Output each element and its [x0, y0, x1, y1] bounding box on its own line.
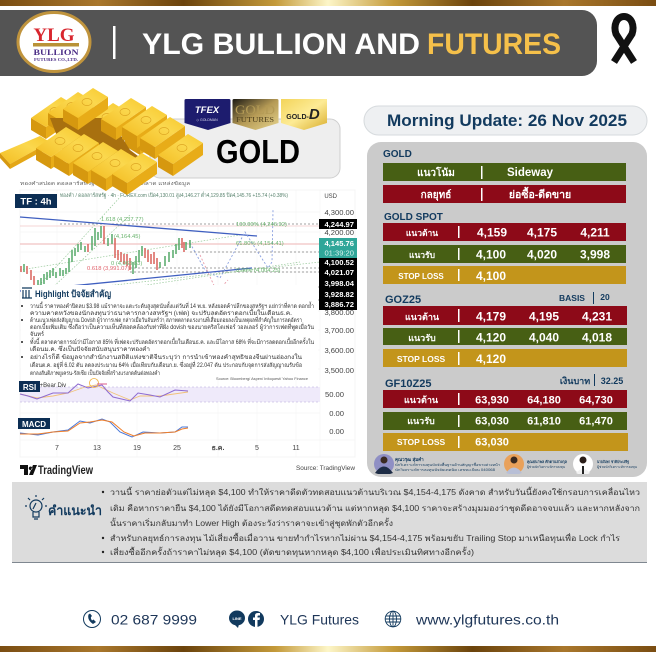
- footer contacts: YLG Futures: [280, 612, 359, 628]
- analyst 1: [374, 454, 500, 474]
- highlight bullets: ทั้งนี้ ตลาดคาดการณ์ว่ามีโอกาส 85% ที่เฟดจะปรับลดอัตราดอกเบี้ยในเดือนธ.ค. และมีโอกาส 68% ที่จะมีการลดดอกเบี้ยอีกครั้งใน: [30, 336, 314, 346]
- section: GF10Z25: 32.25: [601, 376, 623, 386]
- section: GF10Z25: 61,810: [527, 416, 561, 428]
- price axis: [319, 194, 357, 436]
- time axis: [55, 445, 300, 452]
- price axis: 4,145.76: [324, 239, 354, 248]
- icon: LINE: LINE: [232, 616, 242, 621]
- RSI label: [19, 381, 40, 392]
- icon: Gold-D badge: GOLD-D: [286, 106, 320, 123]
- panel: price levels: [367, 142, 647, 477]
- price axis: 3,886.72: [324, 300, 354, 309]
- price axis: 50.00: [325, 390, 344, 399]
- date pill heading: [364, 106, 647, 135]
- icon: light bulb: [25, 495, 47, 519]
- analyst 1: นักวิเคราะห์การลงทุนปัจจัยเทคนิค เลขทะเบียน 040068: [395, 468, 495, 473]
- section: GOLD trend: ย่อซื้อ-ดีดขาย: [509, 186, 571, 201]
- section: GOZ25: [383, 292, 627, 367]
- price axis: 01:39:20: [324, 248, 354, 258]
- header banner: [0, 10, 597, 76]
- icon: TFEX badge: ◇ GOLDMAN: [196, 118, 218, 122]
- chart annotations: 1.618 (4,237.77): [101, 217, 144, 223]
- analyst 2: [504, 454, 568, 474]
- TF label: TF : 4h: [20, 196, 52, 208]
- chart frame: [20, 190, 355, 457]
- time axis: 7: [55, 445, 59, 452]
- section: GOLD trend: [383, 149, 626, 203]
- section: GOZ25: 4,179: [476, 310, 506, 324]
- RSI chart: t+Bear Div: [38, 383, 66, 389]
- recommendation bullets: วานนี้ ราคาย่อตัวแต่ไม่หลุด $4,100 ทำให้ราคาดีดตัวทดสอบแนวต้านบริเวณ $4,154-4,175 ดังคาด สำหรับวันนี้ยังคงใช้กรอบการเคลื่อนไหว: [110, 486, 640, 497]
- highlight bullets: เดือนม.ค. ซึ่งเป็นปัจจัยสนับสนุนราคาทองคำ: [30, 344, 150, 353]
- section: GOLD trend: GOLD: [383, 149, 412, 160]
- chart grid: [20, 190, 355, 457]
- Highlight heading: [21, 285, 318, 380]
- footer contacts: www.ylgfutures.co.th: [415, 612, 559, 628]
- chart annotations: [101, 217, 287, 274]
- price axis: 4,244.97: [324, 220, 354, 229]
- analyst 3: ผู้ช่วยนักวิเคราะห์การลงทุน: [597, 465, 638, 470]
- time axis: 11: [292, 445, 300, 452]
- section: GOZ25: แนวรับ: [408, 333, 436, 343]
- Highlight heading: Highlight ปัจจัยสำคัญ: [35, 288, 111, 300]
- panel: chart: (95.58): [108, 285, 126, 291]
- recommendation heading: คำแนะนำ: [48, 503, 102, 518]
- highlight bullets: จันทร์: [30, 330, 45, 338]
- price axis: 3,700.00: [324, 326, 354, 335]
- section: GOLD SPOT: 4,100: [476, 248, 506, 262]
- time axis: 25: [173, 445, 181, 452]
- MACD label: MACD: [22, 420, 46, 429]
- analyst 1: คุณวรุฒ สุ่มคำ: [395, 456, 424, 463]
- section: GOLD SPOT: STOP LOSS: [398, 272, 444, 281]
- price axis: 0.00: [329, 409, 344, 418]
- chart level lines: [60, 224, 320, 300]
- projected path red: [200, 255, 228, 292]
- price axis: 3,800.00: [324, 308, 354, 317]
- panel: chart: ทองคำ / ดอลลาร์สหรัฐ · 4h · FOREX.com เปิด4,130.01 สูง4,146.27 ต่ำ4,129.85 ปิด4,145.76 +15.74 (+0.38%): [60, 191, 288, 199]
- section: GOZ25: 4,231: [582, 310, 612, 324]
- icon: Gold Futures badge: [232, 99, 278, 130]
- section: GF10Z25: GF10Z25: [385, 378, 431, 390]
- chart annotations: 0 (4,063.83): [111, 261, 142, 267]
- RSI chart: [19, 378, 320, 402]
- recommendation bullets: สำหรับกลยุทธ์การลงทุน ไม้เสี่ยงซื้อเมื่อวาน ขายทำกำไรหากไม่ผ่าน $4,154-4,175 พร้อมขยับ Trailing Stop มาเหนือทุนเพื่อ Lock กำไร: [110, 532, 620, 543]
- section: GOZ25: 4,195: [529, 310, 559, 324]
- section: GF10Z25: 61,470: [579, 416, 613, 428]
- section: GF10Z25: 63,030: [475, 416, 509, 428]
- panel: GOLD label box: [150, 119, 340, 178]
- section: GF10Z25: แนวต้าน: [404, 395, 439, 405]
- section: GOLD SPOT: 4,100: [476, 269, 506, 283]
- logo: YLG Bullion: YLG: [33, 25, 75, 46]
- recommendation bullets: เดิม คือหากราคายืน $4,100 ได้ยังมีโอกาสดีดทดสอบแนวต้าน แต่หากหลุด $4,100 ราคาจะสร้างมุมมองว่าชุดดีดอาจจบแล้ว และหากหลังจาก: [110, 504, 640, 513]
- section: GF10Z25: เงินบาท: [560, 376, 590, 386]
- candlesticks: [21, 226, 190, 290]
- section: GOZ25: 4,018: [582, 330, 612, 344]
- highlight bullets: [21, 300, 314, 381]
- GOLD heading: GOLD: [216, 133, 300, 170]
- title: [142, 28, 561, 61]
- time axis: 13: [93, 445, 101, 452]
- price axis: 3,500.00: [324, 366, 354, 375]
- highlight bullets: วานนี้ ราคาทองคำปิดลบ $3.98 แม้ราคาจะแตะระดับสูงสุดนับตั้งแต่วันที่ 14 พ.ย. หลังยอดค้าปลีกของสหรัฐฯ แย่กว่าที่คาด ตอกย้ำ: [30, 300, 314, 310]
- icon: gold bars: [0, 88, 203, 195]
- chart annotations: 0.00% (4,004.25): [236, 268, 281, 274]
- chart info line: ทองคำสปอต ดอลลาร์สหรัฐ ต่อ ออนซ์ ข้อมูลตลาด แหล่งข้อมูล: [20, 180, 190, 187]
- section: GF10Z25: 63,930: [475, 394, 509, 406]
- icon: Gold-D badge: [281, 99, 327, 130]
- analyst 3: นายภิเษก ชาติประเสริฐ: [597, 458, 629, 465]
- icon: LINE: [229, 610, 245, 628]
- projected path blue: [190, 210, 273, 278]
- panel: recommendation: [12, 482, 647, 563]
- date pill heading: Morning Update: 26 Nov 2025: [387, 111, 627, 130]
- price axis: 3,998.04: [324, 279, 355, 288]
- section: GOLD trend: Sideway: [507, 167, 554, 179]
- section: GF10Z25: แนวรับ: [407, 416, 435, 426]
- blue trend channel: [20, 217, 257, 291]
- section: GOLD SPOT: GOLD SPOT: [384, 212, 443, 223]
- highlight bullets: ด้านแนวเฟดส่งสัญญาณ Dovish ผู้ว่าการเฟด กล่าวเมื่อวันจันทร์ว่า สภาพตลาดแรงงานที่เสื่อมถอยลงเป็นเหตุผลที่สำคัญในการลดอัตรา: [30, 315, 302, 324]
- time axis: 19: [133, 445, 141, 452]
- icon: Gold Futures badge: GOLD: [235, 103, 275, 117]
- section: GOLD SPOT: 4,020: [527, 248, 557, 262]
- section: GOZ25: 4,120: [476, 352, 506, 366]
- TradingView logo: [20, 463, 94, 477]
- icon: TFEX badge: TFEX: [195, 105, 220, 116]
- logo: YLG Bullion: BULLION: [34, 47, 79, 57]
- price axis: 4,300.00: [324, 208, 354, 217]
- chart annotations: 100.00% (4,246.92): [236, 222, 287, 228]
- chart annotations: (4,164.45): [114, 234, 140, 240]
- TF label: [15, 194, 57, 208]
- section: GOLD trend: แนวโน้ม: [417, 166, 455, 179]
- section: GF10Z25: [383, 374, 628, 451]
- analyst 3: [573, 454, 638, 474]
- highlight bullets: ดอกเบี้ยเพิ่มเติม ซึ่งถือว่าเป็นความเห็นที่สอดคล้องกับท่าทีฝั่ง dovish ของนายคริสโตเฟอร์ วอลเลอร์ ผู้ว่าการเฟดที่พูดเมื่อวัน: [30, 321, 314, 331]
- price axis: 4,200.00: [324, 228, 354, 237]
- section: GF10Z25: 64,730: [579, 394, 613, 406]
- price axis: 4,021.07: [324, 268, 354, 277]
- highlight bullets: ความคาดหวังของนักลงทุนว่าธนาคารกลางสหรัฐฯ (เฟด) จะปรับลดอัตราดอกเบี้ยในเดือนธ.ค.: [30, 307, 292, 317]
- section: GOZ25: แนวต้าน: [405, 312, 440, 322]
- price axis: 0.00: [329, 427, 344, 436]
- section: GOLD SPOT: 4,175: [527, 226, 557, 240]
- time axis: 5: [255, 445, 259, 452]
- RSI label: RSI: [23, 383, 36, 392]
- chart annotations: 61.80% (4,154.41): [236, 241, 284, 247]
- chart source note: Source: TradingView: [296, 465, 355, 472]
- highlight bullets: เดือนต.ค. อยู่ที่ 6.02 ตัน ลดลงประมาณ 64% เมื่อเทียบกับเดือนก.ย. ซึ่งอยู่ที่ 22.047 ตัน ประกอบกับจุดการส่งสัญญาณรับข้อ: [30, 361, 302, 369]
- section: GOZ25: 4,120: [476, 330, 506, 344]
- price axis: USD: [324, 194, 338, 200]
- section: GOZ25: STOP LOSS: [397, 354, 445, 364]
- title: FUTURES: [427, 28, 561, 61]
- MACD label: [18, 418, 50, 429]
- analyst credits: [374, 454, 638, 474]
- section: GOLD SPOT: 4,159: [477, 226, 507, 240]
- icon: Facebook: [248, 611, 264, 627]
- panel: chart: 0.618 (3,991.07): [87, 266, 130, 272]
- logo: YLG Bullion: FUTURES CO.,LTD.: [34, 57, 78, 62]
- icon: black mourning ribbon: [614, 16, 634, 62]
- recommendation bullets: นั้นราคาเริ่มกลับมาทำ Lower High ต้องระวังว่าราคาจะเข้าสู่ชุดพักตัวอีกครั้ง: [110, 517, 393, 529]
- bottom gold bar: [0, 646, 656, 652]
- section: GOLD SPOT: 4,211: [580, 226, 610, 240]
- MACD chart: [18, 418, 188, 437]
- section: GF10Z25: STOP LOSS: [397, 437, 445, 447]
- section: GOZ25: BASIS: [559, 293, 585, 303]
- fibonacci dotted channel: [20, 195, 320, 298]
- section: GOLD trend: กลยุทธ์: [421, 189, 451, 201]
- section: GOZ25: GOZ25: [385, 294, 421, 306]
- section: GF10Z25: 63,030: [475, 436, 509, 448]
- icon: TFEX badge: [184, 99, 230, 130]
- highlight bullets: Source: Bloomberg/ Aspen/ Infoquest/ Yahoo Finance: [216, 377, 308, 381]
- highlight bullets: อย่างไรก็ดี ข้อมูลจากสำนักงานสถิติแห่งชาติจีนระบุว่า การนำเข้าทองคำสุทธิของจีนผ่านฮ่องกงใน: [30, 352, 302, 361]
- section: GOLD SPOT: แนวรับ: [409, 250, 435, 260]
- icon: phone: [84, 610, 100, 628]
- icon: globe: [385, 611, 401, 627]
- footer contacts: 02 687 9999: [111, 612, 197, 628]
- section: GOLD SPOT: [383, 212, 626, 284]
- price axis: 3,928.82: [324, 290, 354, 299]
- section: GF10Z25: 64,180: [527, 394, 561, 406]
- TradingView logo: TradingView: [38, 463, 94, 477]
- section: GOLD SPOT: แนวต้าน: [406, 228, 438, 238]
- recommendation bullets: [102, 486, 640, 557]
- recommendation bullets: เสี่ยงซื้ออีกครั้งถ้าราคาไม่หลุด $4,100 (ตัดขาดทุนหากหลุด $4,100 เพื่อประเมินทิศทางอีกครั้ง): [110, 546, 474, 557]
- analyst 1: นักวิเคราะห์การลงทุนปัจจัยพื้นฐานด้านสัญญาซื้อขายล่วงหน้า: [395, 462, 500, 468]
- section: GOZ25: 4,040: [529, 330, 559, 344]
- top gold bar: [0, 0, 656, 6]
- time axis: ธ.ค.: [212, 445, 224, 452]
- title: YLG BULLION AND: [142, 28, 420, 61]
- price axis: 3,600.00: [324, 346, 354, 355]
- analyst 2: คุณธนาพล ศักดาแสวงกุล: [527, 459, 568, 465]
- highlight bullets: ตกลงสันติภาพยูเครน-รัสเซีย เป็นปัจจัยที่สร้างแรงกดดันต่อทองคำ: [30, 368, 160, 377]
- analyst 2: ผู้ช่วยนักวิเคราะห์การลงทุน: [527, 465, 566, 470]
- section: GOZ25: 20: [600, 292, 610, 302]
- footer contacts: [84, 610, 559, 628]
- section: GOLD SPOT: 3,998: [580, 248, 610, 262]
- price axis: 4,100.52: [324, 258, 354, 267]
- logo: YLG Bullion: [18, 12, 90, 72]
- panel: chart: [15, 180, 357, 457]
- icon: Gold Futures badge: FUTURES: [236, 116, 274, 124]
